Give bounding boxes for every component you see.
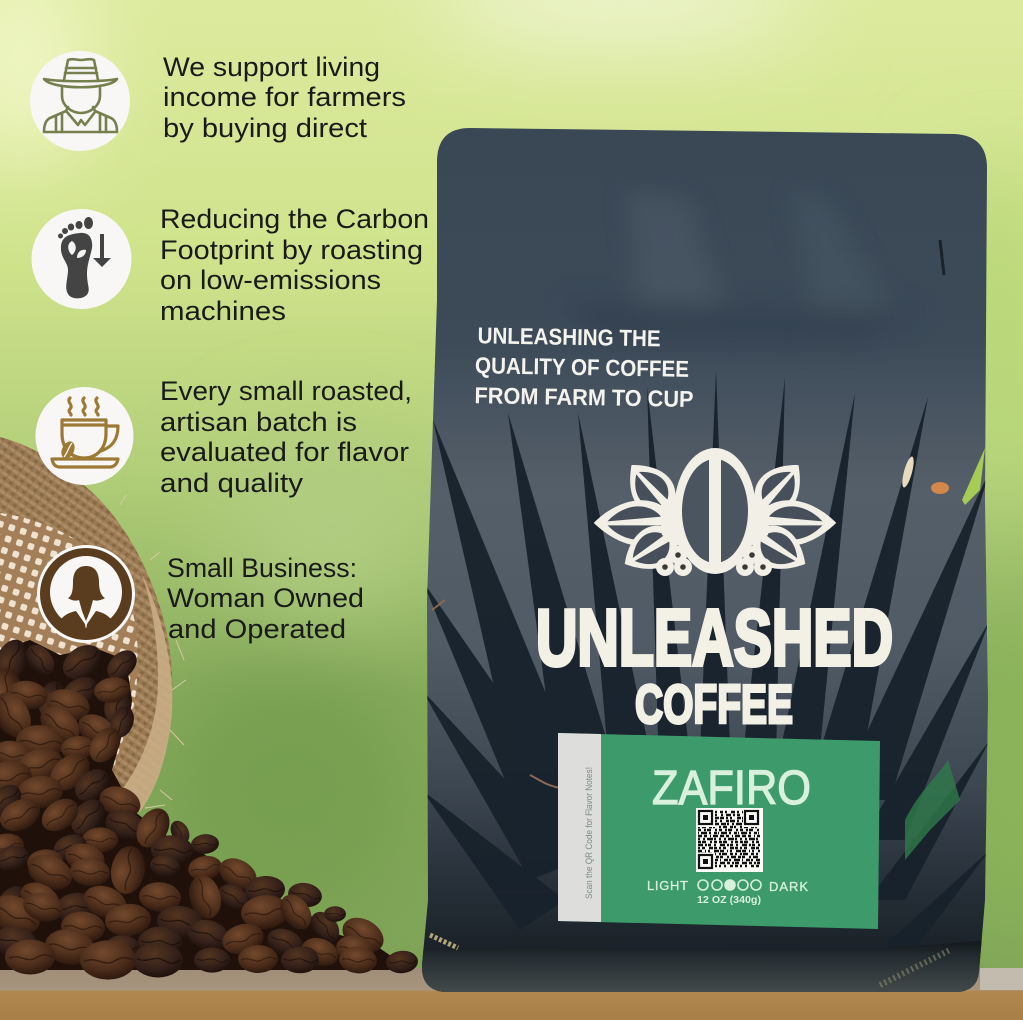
bag tagline: UNLEASHING THE (477, 322, 661, 351)
roast scale: LIGHT (647, 878, 688, 893)
icon: farmer (30, 51, 130, 151)
coffee bag (420, 128, 990, 995)
text: living income: income for farmers (163, 82, 406, 112)
bag bottom fold (420, 940, 990, 995)
bag tagline: QUALITY OF COFFEE (475, 352, 689, 382)
text: artisan batch: artisan batch is (160, 407, 357, 437)
weight: 12 OZ (340g) (697, 894, 761, 906)
brand name: COFFEE (635, 673, 793, 735)
text: carbon footprint: machines (160, 296, 286, 326)
text: small business (167, 553, 364, 644)
roast scale (647, 878, 808, 894)
coffee bean pile (0, 635, 419, 980)
text: carbon footprint: Footprint by roasting (160, 235, 423, 265)
brand name (536, 593, 893, 735)
QR code (696, 808, 763, 872)
label side note: Scan the QR Code for Flavor Notes! (584, 767, 595, 899)
bag tagline: FROM FARM TO CUP (474, 382, 694, 412)
burlap sack (0, 437, 186, 812)
text: artisan batch (160, 376, 412, 498)
text: small business: Woman Owned (167, 583, 364, 613)
icon: footprint with arrow (32, 209, 132, 309)
text: carbon footprint (160, 204, 429, 326)
icon: woman owned (37, 545, 135, 643)
bag crease highlights (640, 204, 840, 291)
text: artisan batch: evaluated for flavor (160, 437, 409, 467)
text: living income: by buying direct (163, 113, 368, 143)
bag logo: bean and leaves (593, 448, 837, 583)
text: living income: We support living (163, 52, 380, 82)
wooden table (0, 968, 1023, 1020)
text: artisan batch: Every small roasted, (160, 376, 412, 406)
brand name: UNLEASHED (536, 593, 893, 682)
coffee name: ZAFIRO (652, 762, 811, 815)
text: living income (163, 52, 406, 143)
roast scale: DARK (769, 879, 808, 894)
text: small business: Small Business: (167, 553, 357, 583)
text: carbon footprint: Reducing the Carbon (160, 204, 429, 234)
bag reflections (962, 448, 985, 505)
icon: coffee cup (36, 387, 134, 485)
text: small business: and Operated (168, 614, 346, 644)
product label (558, 733, 880, 929)
text: artisan batch: and quality (160, 468, 304, 498)
sunburst rays (422, 370, 990, 955)
bag tagline (474, 322, 695, 412)
text: carbon footprint: on low-emissions (160, 265, 381, 295)
